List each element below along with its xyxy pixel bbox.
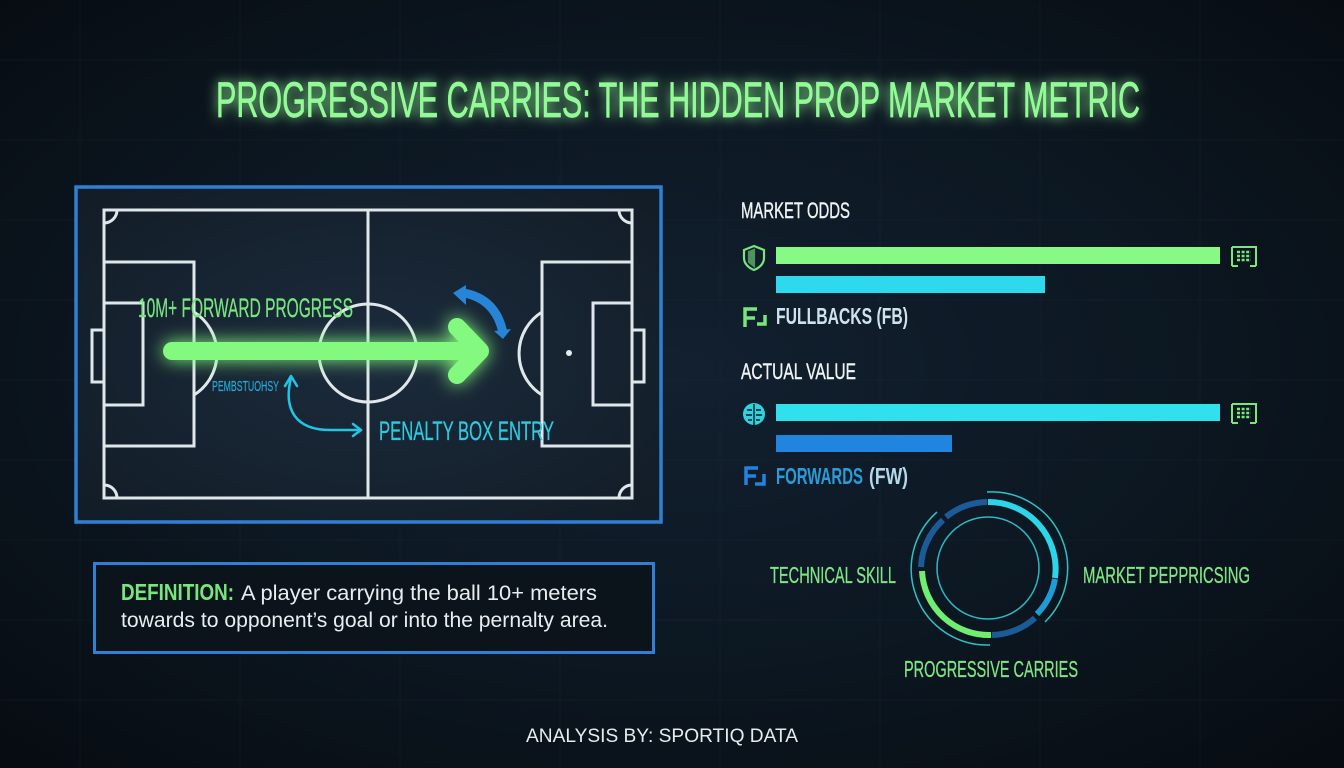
cyan curved arrow (285, 376, 361, 436)
icon: F mark (745, 309, 765, 327)
label: small cyan: PEMBSTUOHSY (212, 378, 279, 395)
label: technical skill: TECHNICAL SKILL (770, 562, 896, 588)
label: forward progress: 10M+ FORWARD PROGRESS (138, 293, 353, 323)
icon: brain (743, 403, 765, 425)
ring segment: dark blue top (946, 502, 987, 517)
penalty spot (566, 350, 572, 356)
definition text: DEFINITION: (121, 579, 234, 605)
icon: goal grid (1232, 247, 1256, 266)
chart: actual value (741, 359, 1256, 489)
label: penalty box entry: PENALTY BOX ENTRY (379, 416, 554, 446)
panel: definition (94, 564, 654, 652)
ring segment: dark blue left (921, 520, 943, 567)
icon: shield (744, 246, 764, 270)
bar: actual value second (776, 435, 952, 452)
ring diagram (911, 492, 1068, 645)
label: forwards: FORWARDS (776, 463, 863, 489)
icon: F mark (746, 468, 764, 485)
bar: actual value top (776, 404, 1220, 421)
ring segment: light blue (1037, 579, 1055, 614)
ring segment: green (922, 571, 991, 635)
pitch markings (92, 210, 644, 498)
inner ring (937, 517, 1039, 619)
footer credit: ANALYSIS BY: SPORTIQ DATA (526, 726, 798, 747)
chart: market odds (741, 198, 1256, 329)
blue curved double arrow (453, 285, 511, 339)
panel: football pitch diagram (76, 187, 661, 522)
label: fullbacks: FULLBACKS (FB) (776, 303, 908, 329)
outer thin arcs (987, 492, 1068, 622)
heading: market odds: MARKET ODDS (741, 198, 850, 223)
label: market repricing: MARKET PEPPRICSING (1083, 562, 1250, 588)
heading: actual value: ACTUAL VALUE (741, 359, 856, 384)
label: progressive carries: PROGRESSIVE CARRIES (904, 656, 1078, 682)
label: forwards: (FW) (869, 463, 908, 489)
bar: market odds second (776, 276, 1045, 293)
definition text: towards to opponent’s goal or into the pernalty area. (121, 609, 608, 632)
ring segment: dark blue lower (992, 618, 1035, 635)
icon: goal grid (1232, 404, 1256, 423)
bar: market odds top (776, 247, 1220, 264)
green progress arrow (172, 327, 480, 375)
definition text: A player carrying the ball 10+ meters (241, 582, 597, 605)
ring segment: cyan (988, 502, 1056, 578)
